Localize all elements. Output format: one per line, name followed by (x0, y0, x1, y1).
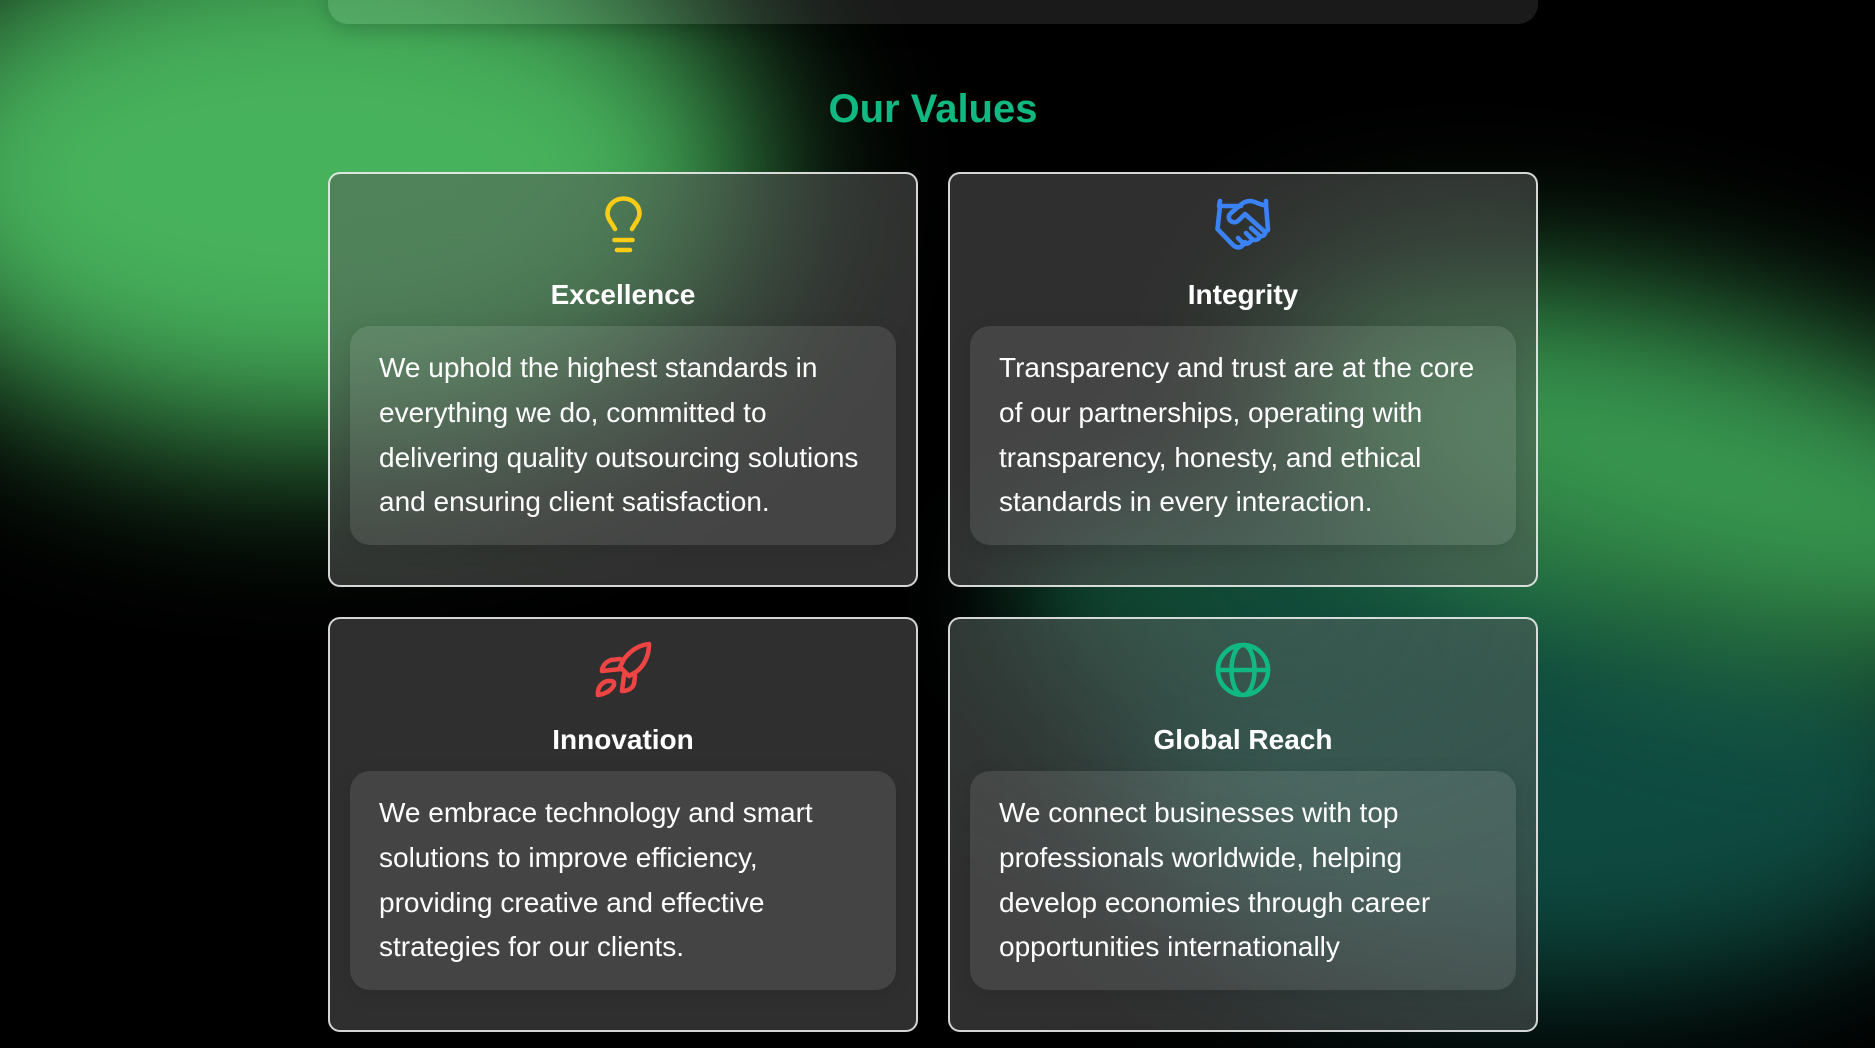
text: Excellence description: We uphold the highest standards in everything we do, committed to delivering quality outsourcing solutions and ensuring client satisfaction. (379, 352, 858, 517)
icon: lightbulb (605, 196, 642, 252)
heading: Global Reach: Global Reach (1154, 724, 1332, 755)
panel: Integrity (948, 172, 1538, 587)
text: Global Reach description: We connect businesses with top professionals worldwide, helping develop economies through career opportunities internationally (999, 797, 1430, 962)
heading: Integrity: Integrity (1188, 279, 1298, 310)
top panel edge (328, 0, 1538, 24)
text: Integrity description (970, 326, 1516, 545)
heading: Our Values: Our Values (828, 87, 1037, 131)
icon: rocket (596, 642, 652, 698)
heading: Innovation: Innovation (552, 724, 694, 755)
panel: Innovation (328, 617, 918, 1032)
text: Innovation description (350, 771, 896, 990)
panel: Global Reach (948, 617, 1538, 1032)
panel: Excellence (328, 172, 918, 587)
heading: Excellence: Excellence (551, 279, 695, 310)
text: Global Reach description (970, 771, 1516, 990)
icon: handshake (1215, 198, 1270, 250)
text: Innovation description: We embrace technology and smart solutions to improve efficiency, providing creative and effective strategies for our clients. (379, 797, 813, 962)
text: Integrity description: Transparency and trust are at the core of our partnerships, operating with transparency, honesty, and ethical standards in every interaction. (999, 352, 1474, 517)
icon: globe (1216, 642, 1270, 698)
text: Excellence description (350, 326, 896, 545)
